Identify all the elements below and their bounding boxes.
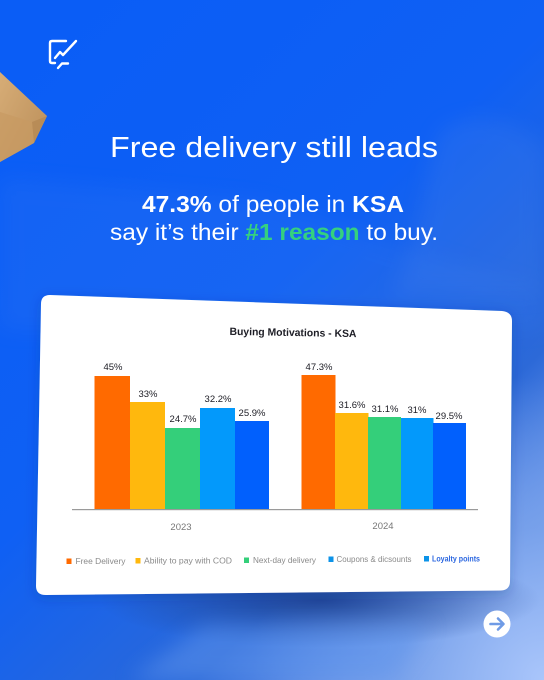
bar chart: 2023: 24.7% [170,414,197,425]
axis baseline [72,509,478,510]
legend: Coupons & dicsounts [336,554,412,564]
chart title: Buying Motivations - KSA [229,326,357,340]
bar chart: 2024: 47.3% [306,362,333,373]
bar chart: 2024: 29.5% [436,411,463,422]
legend: Ability to pay with COD [144,556,232,566]
legend: Loyalty points [432,554,480,564]
axis labels: 2024 [372,521,394,532]
legend: Free Delivery [76,556,126,566]
bar chart: 2024: 31.1% [372,404,399,415]
bar chart: 2024: 31% [407,405,427,416]
bar chart: 2023: 45% [103,362,123,373]
legend [66,554,480,566]
arrow button [484,610,510,638]
icon: cardboard box [0,72,47,162]
legend: Next-day delivery [253,555,317,565]
bar chart: 2023: 32.2% [205,394,232,405]
bar chart: 2023: 33% [138,389,158,400]
subtitle [110,191,438,245]
axis labels [170,521,394,533]
bar chart: 2024 [302,362,466,509]
bar chart: 2023 [94,362,269,509]
panel: chart card [36,295,512,595]
subtitle: say it’s their #1 reason to buy. [110,219,438,245]
subtitle: 47.3% of people in KSA [142,191,404,217]
bar chart: 2023: 25.9% [239,408,266,419]
axis labels: 2023 [170,522,192,533]
bar chart: 2024: 31.6% [339,400,366,411]
icon: chart logo [50,41,76,68]
title: Free delivery still leads [110,132,438,164]
